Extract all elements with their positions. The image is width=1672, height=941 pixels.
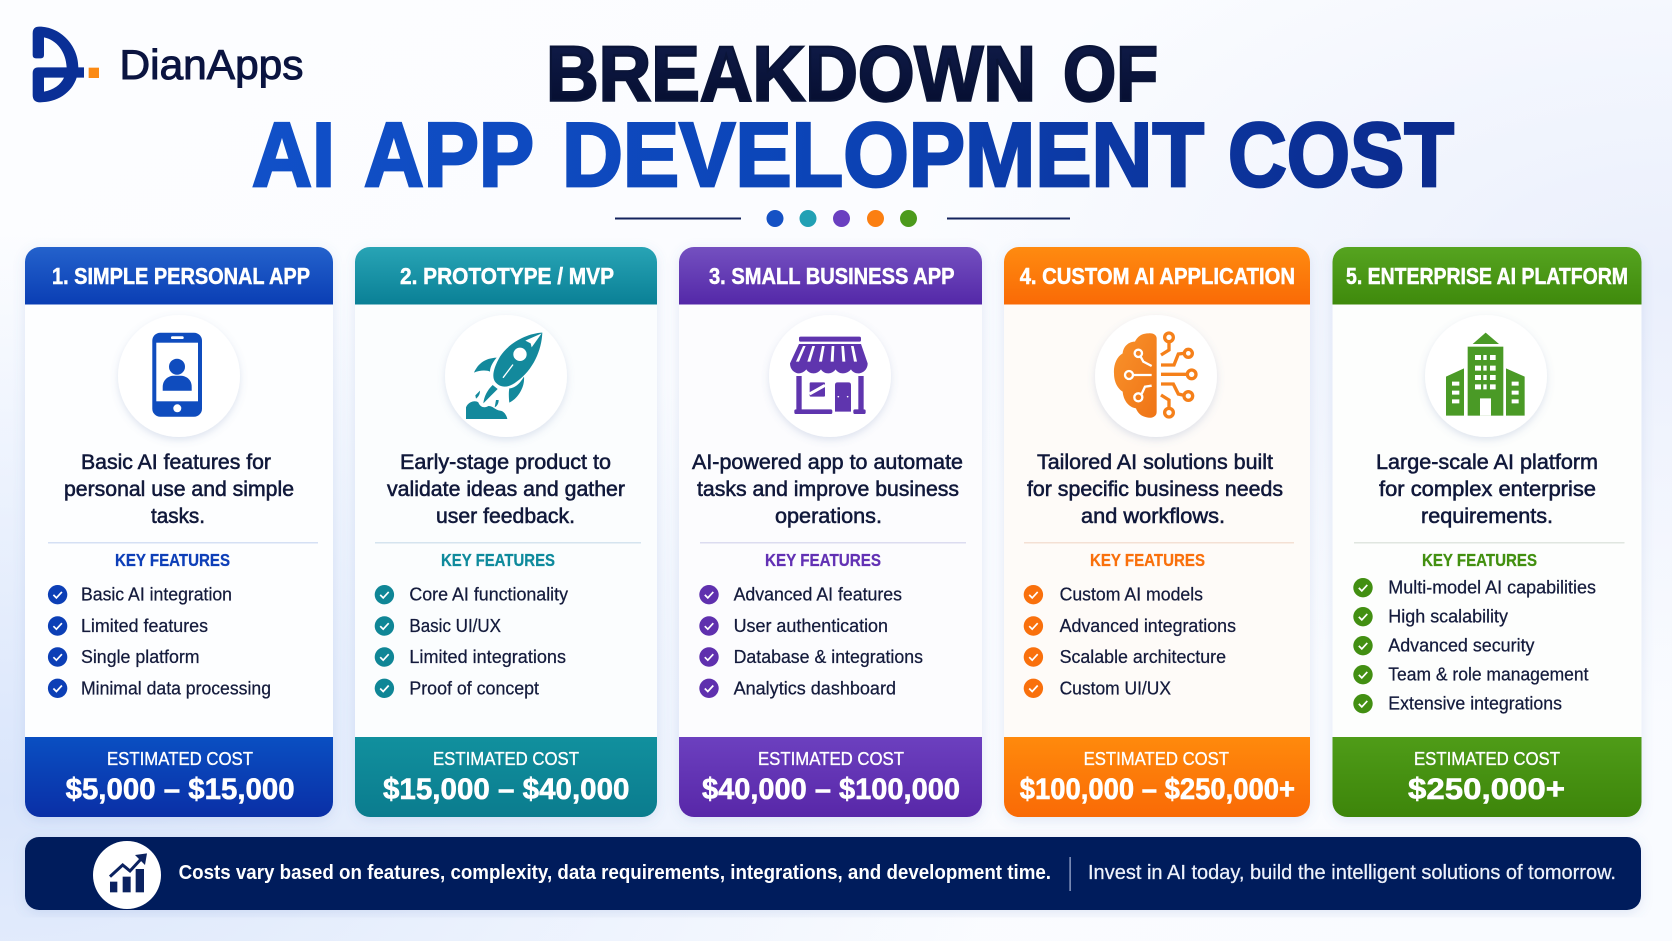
feature list: Core AI functionality bbox=[409, 584, 569, 605]
feature list: Team & role management bbox=[1388, 664, 1588, 685]
key features heading: KEY FEATURES bbox=[441, 550, 555, 570]
feature list: User authentication bbox=[734, 615, 888, 636]
key features heading: KEY FEATURES bbox=[115, 550, 230, 570]
logo: DianApps bbox=[33, 27, 303, 102]
title line 2: DEVELOPMENT bbox=[562, 105, 1204, 206]
key features heading: KEY FEATURES bbox=[765, 550, 881, 570]
description: validate ideas and gather bbox=[387, 478, 625, 501]
card header bbox=[25, 247, 333, 304]
banner tagline: Invest in AI today, build the intelligent solutions of tomorrow. bbox=[1088, 861, 1616, 884]
cost footer: $40,000 – $100,000 bbox=[702, 773, 960, 806]
description: Tailored AI solutions built bbox=[1037, 451, 1273, 474]
feature list: Minimal data processing bbox=[81, 677, 271, 698]
cost footer: ESTIMATED COST bbox=[758, 749, 904, 770]
cost footer bbox=[1332, 737, 1642, 817]
description: tasks and improve business bbox=[697, 478, 959, 501]
feature list: High scalability bbox=[1388, 606, 1509, 627]
cost footer bbox=[355, 737, 657, 817]
feature list: Advanced AI features bbox=[734, 584, 902, 605]
feature list: Basic UI/UX bbox=[409, 615, 501, 636]
panel: enterprise AI platform bbox=[1332, 247, 1642, 817]
feature list bbox=[699, 584, 923, 698]
card body bbox=[25, 247, 333, 817]
feature list bbox=[48, 584, 271, 698]
panel: small business app bbox=[679, 247, 982, 817]
title line 2: COST bbox=[1228, 105, 1454, 206]
description bbox=[1027, 451, 1283, 528]
feature list: Limited features bbox=[81, 615, 208, 636]
key features heading: KEY FEATURES bbox=[1090, 550, 1205, 570]
description: Basic AI features for bbox=[81, 451, 271, 474]
header text: 2. PROTOTYPE / MVP bbox=[400, 263, 614, 289]
feature list: Proof of concept bbox=[409, 677, 539, 698]
icon: smartphone with person bbox=[152, 333, 202, 417]
cost footer bbox=[1004, 737, 1310, 817]
description: requirements. bbox=[1421, 505, 1553, 528]
description: Early-stage product to bbox=[400, 451, 611, 474]
panel: simple personal app bbox=[25, 247, 333, 817]
header text: 1. SIMPLE PERSONAL APP bbox=[52, 263, 310, 289]
feature list: Basic AI integration bbox=[81, 584, 232, 605]
description: for complex enterprise bbox=[1379, 478, 1596, 501]
card body bbox=[355, 247, 657, 817]
title line 1: BREAKDOWN bbox=[546, 30, 1036, 118]
feature list: Database & integrations bbox=[734, 646, 923, 667]
feature list: Custom AI models bbox=[1060, 584, 1203, 605]
feature list: Multi-model AI capabilities bbox=[1388, 577, 1596, 598]
panel: prototype / MVP bbox=[355, 247, 657, 817]
title line 2: APP bbox=[364, 105, 534, 206]
logo wordmark: DianApps bbox=[120, 41, 304, 88]
cost footer: $100,000 – $250,000+ bbox=[1020, 773, 1295, 806]
title bbox=[252, 30, 1454, 206]
title line 2 bbox=[252, 105, 1454, 206]
cost footer: ESTIMATED COST bbox=[433, 749, 579, 770]
cost footer: $5,000 – $15,000 bbox=[66, 773, 295, 806]
icon: storefront bbox=[790, 337, 868, 414]
bottom banner bbox=[25, 837, 1641, 910]
cost footer: ESTIMATED COST bbox=[1414, 749, 1560, 770]
feature list bbox=[1024, 584, 1236, 698]
card body bbox=[1332, 247, 1642, 817]
banner main message: Costs vary based on features, complexity, data requirements, integrations, and development time. bbox=[179, 861, 1051, 884]
header text: 3. SMALL BUSINESS APP bbox=[709, 263, 954, 289]
description bbox=[1376, 451, 1598, 528]
feature list: Advanced security bbox=[1388, 635, 1535, 656]
feature list: Custom UI/UX bbox=[1060, 677, 1171, 698]
description: operations. bbox=[775, 505, 882, 528]
cost footer: $250,000+ bbox=[1408, 773, 1565, 806]
icon circle bbox=[118, 315, 240, 437]
feature list bbox=[375, 584, 569, 698]
icon circle bbox=[1425, 315, 1547, 437]
card header bbox=[1332, 247, 1642, 304]
header text: 4. CUSTOM AI APPLICATION bbox=[1020, 263, 1295, 289]
key features heading: KEY FEATURES bbox=[1422, 550, 1537, 570]
feature list: Extensive integrations bbox=[1388, 693, 1562, 714]
cost footer: $15,000 – $40,000 bbox=[383, 773, 630, 806]
card header bbox=[679, 247, 982, 304]
icon circle bbox=[445, 315, 567, 437]
description: for specific business needs bbox=[1027, 478, 1283, 501]
card body bbox=[679, 247, 982, 817]
title divider with dots bbox=[615, 210, 1070, 227]
description bbox=[692, 451, 963, 528]
feature list: Single platform bbox=[81, 646, 200, 667]
description: tasks. bbox=[151, 505, 205, 528]
feature list: Analytics dashboard bbox=[734, 677, 896, 698]
title line 2: AI bbox=[252, 105, 335, 206]
feature list: Scalable architecture bbox=[1060, 646, 1226, 667]
icon: rocket bbox=[466, 333, 542, 419]
icon: office building bbox=[1446, 333, 1525, 416]
description: AI-powered app to automate bbox=[692, 451, 963, 474]
icon circle bbox=[769, 315, 891, 437]
card header bbox=[1004, 247, 1310, 304]
description: and workflows. bbox=[1081, 505, 1225, 528]
card body bbox=[1004, 247, 1310, 817]
icon: AI brain with circuits bbox=[1114, 333, 1196, 418]
description: user feedback. bbox=[436, 505, 575, 528]
header text: 5. ENTERPRISE AI PLATFORM bbox=[1346, 263, 1628, 289]
feature list: Limited integrations bbox=[409, 646, 566, 667]
description: Large-scale AI platform bbox=[1376, 451, 1598, 474]
icon circle bbox=[1095, 315, 1217, 437]
panel: custom AI application bbox=[1004, 247, 1310, 817]
feature list bbox=[1353, 577, 1596, 714]
cost footer bbox=[25, 737, 333, 817]
icon: growth chart bbox=[93, 841, 161, 909]
icon: logo mark bbox=[33, 27, 99, 102]
description bbox=[387, 451, 625, 528]
feature list: Advanced integrations bbox=[1060, 615, 1236, 636]
description bbox=[64, 451, 294, 528]
title line 1: OF bbox=[1063, 30, 1158, 118]
description: personal use and simple bbox=[64, 478, 294, 501]
cost footer: ESTIMATED COST bbox=[1084, 749, 1229, 770]
card header bbox=[355, 247, 657, 304]
cost footer bbox=[679, 737, 982, 817]
cost footer: ESTIMATED COST bbox=[107, 749, 253, 770]
